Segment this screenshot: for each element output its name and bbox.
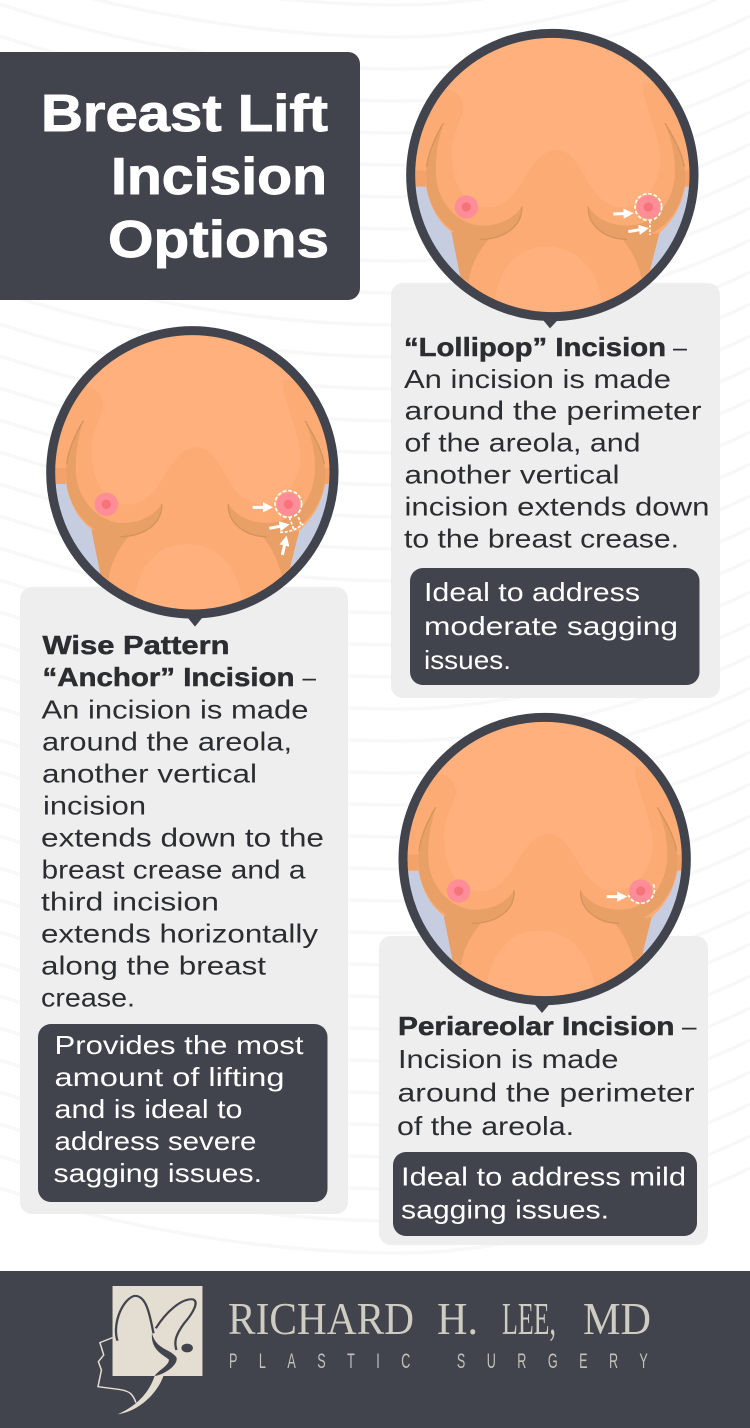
- logo wordmark: LEE,: [502, 1293, 556, 1344]
- panel: lollipop incision: [391, 30, 720, 698]
- anchor callout: and is ideal to: [54, 1094, 242, 1124]
- panel: wise pattern anchor incision: [20, 327, 348, 1214]
- anchor callout: Provides the most: [54, 1030, 304, 1060]
- logo mark: [98, 1286, 202, 1414]
- periareolar description: Incision is made: [398, 1044, 618, 1074]
- title panel: [0, 52, 360, 300]
- periareolar description: [397, 1011, 697, 1141]
- logo wordmark: PLASTIC SURGERY: [229, 1349, 648, 1373]
- periareolar callout: Ideal to address mild: [401, 1162, 686, 1192]
- logo wordmark: RICHARD: [228, 1293, 414, 1344]
- lollipop description: another vertical: [404, 460, 620, 490]
- anchor description: “Anchor” Incision: [42, 662, 294, 692]
- illustration: periareolar incision: [399, 714, 692, 1013]
- lollipop callout: issues.: [424, 645, 511, 675]
- title: Breast Lift: [41, 85, 328, 143]
- anchor description: incision: [43, 790, 146, 820]
- anchor callout: amount of lifting: [54, 1062, 284, 1092]
- illustration: anchor incision: [47, 327, 340, 627]
- periareolar callout: [393, 1152, 697, 1236]
- lollipop description: incision extends down: [404, 492, 710, 522]
- lollipop description: of the areola, and: [404, 428, 640, 458]
- anchor description: Wise Pattern: [42, 630, 230, 660]
- anchor description: [41, 630, 324, 1012]
- lollipop description: “Lollipop” Incision: [404, 332, 666, 362]
- title: Incision: [111, 148, 327, 206]
- lollipop callout: [410, 568, 700, 685]
- anchor description: crease.: [41, 982, 135, 1012]
- anchor description: –: [302, 662, 316, 692]
- anchor description: An incision is made: [42, 694, 308, 724]
- footer: [0, 1271, 750, 1428]
- anchor description: another vertical: [42, 758, 257, 788]
- logo wordmark: MD: [583, 1293, 651, 1344]
- periareolar description: around the perimeter: [398, 1078, 695, 1108]
- anchor description: third incision: [41, 886, 219, 916]
- illustration: lollipop incision: [407, 30, 700, 328]
- logo wordmark: [228, 1293, 651, 1373]
- anchor callout: [38, 1024, 328, 1202]
- periareolar description: Periareolar Incision: [398, 1011, 674, 1041]
- lollipop description: –: [673, 332, 688, 362]
- lollipop callout: moderate sagging: [424, 611, 678, 641]
- lollipop description: [404, 332, 710, 554]
- title: Options: [108, 211, 329, 269]
- lollipop description: around the perimeter: [404, 396, 702, 426]
- lollipop description: to the breast crease.: [404, 524, 679, 554]
- lollipop callout: Ideal to address: [424, 577, 640, 607]
- lollipop description: An incision is made: [404, 364, 671, 394]
- anchor callout: sagging issues.: [54, 1158, 262, 1188]
- panel: periareolar incision: [379, 714, 708, 1245]
- periareolar callout: sagging issues.: [401, 1194, 609, 1224]
- logo wordmark: H.: [437, 1293, 478, 1344]
- periareolar description: of the areola.: [397, 1111, 574, 1141]
- title: [41, 85, 329, 269]
- anchor description: extends down to the: [41, 822, 324, 852]
- anchor description: along the breast: [41, 950, 267, 980]
- anchor description: breast crease and a: [42, 854, 306, 884]
- anchor description: extends horizontally: [41, 918, 318, 948]
- anchor callout: address severe: [54, 1126, 256, 1156]
- anchor description: around the areola,: [42, 726, 292, 756]
- periareolar description: –: [682, 1011, 697, 1041]
